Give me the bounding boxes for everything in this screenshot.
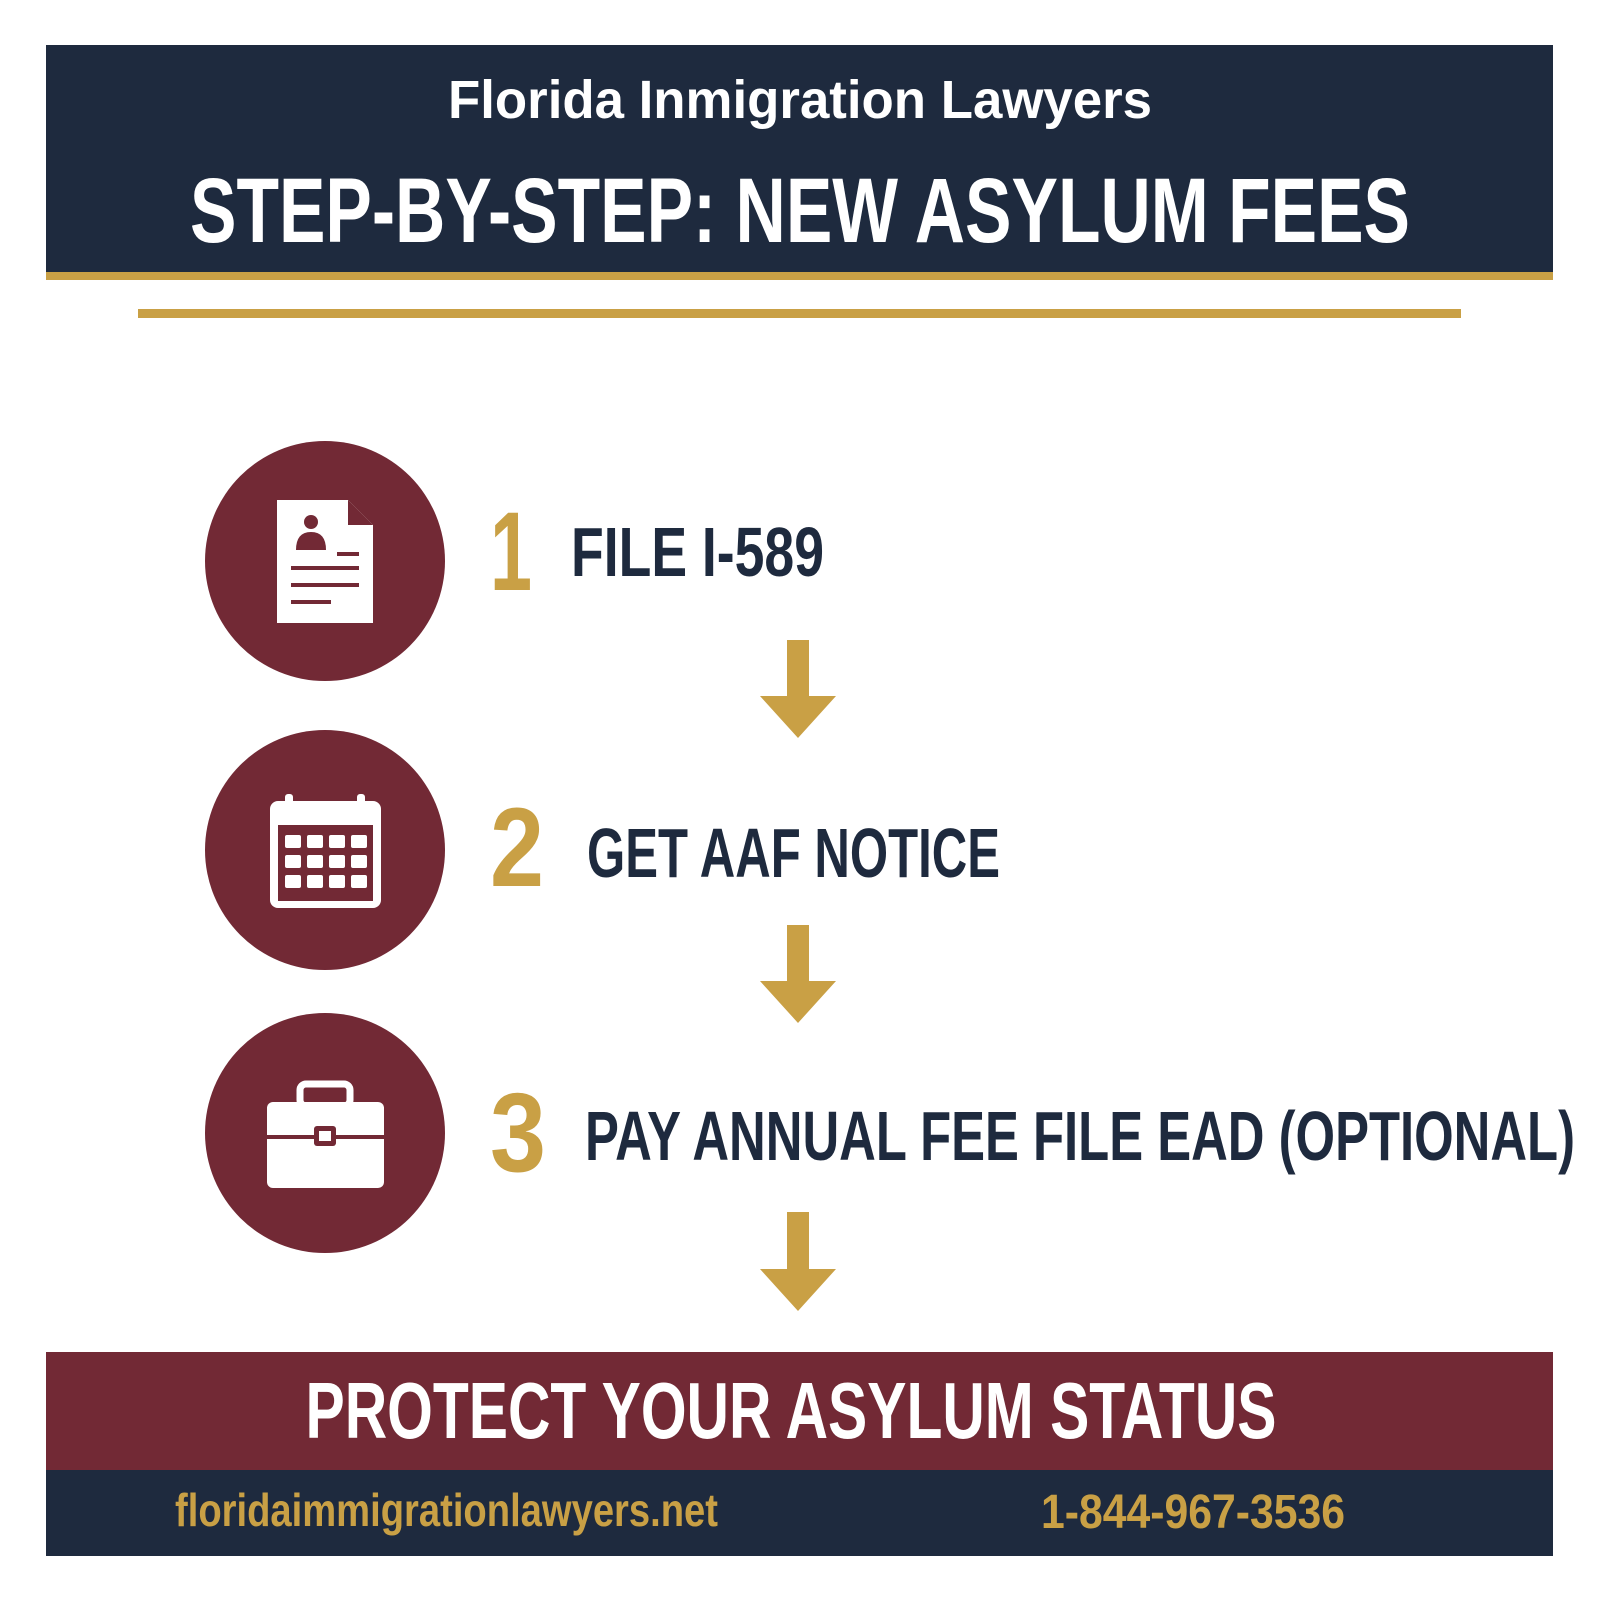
arrow 1 bbox=[760, 640, 836, 738]
step 1 bbox=[205, 441, 824, 681]
footer banner: call to action bbox=[46, 1352, 1553, 1470]
step 2 bbox=[205, 730, 1000, 970]
number 1: 1 bbox=[490, 489, 532, 614]
phone: 1-844-967-3536 bbox=[1041, 1486, 1345, 1539]
step text 1: FILE I-589 bbox=[571, 513, 824, 591]
number 3: 3 bbox=[490, 1070, 546, 1195]
step text 2: GET AAF NOTICE bbox=[587, 814, 1000, 892]
arrow 2 bbox=[760, 925, 836, 1023]
number 2: 2 bbox=[490, 785, 544, 910]
icon: briefcase bbox=[205, 1013, 445, 1253]
footer banner: call to action: PROTECT YOUR ASYLUM STATUS bbox=[306, 1366, 1276, 1455]
icon: calendar bbox=[205, 730, 445, 970]
icon: document bbox=[205, 441, 445, 681]
website: floridaimmigrationlawyers.net bbox=[175, 1484, 718, 1536]
arrow 3 bbox=[760, 1212, 836, 1311]
footer contact bar bbox=[46, 1470, 1553, 1556]
subtitle: firm name: Florida Inmigration Lawyers bbox=[448, 70, 1152, 130]
step 3 bbox=[205, 1013, 1575, 1253]
header banner bbox=[46, 45, 1553, 280]
